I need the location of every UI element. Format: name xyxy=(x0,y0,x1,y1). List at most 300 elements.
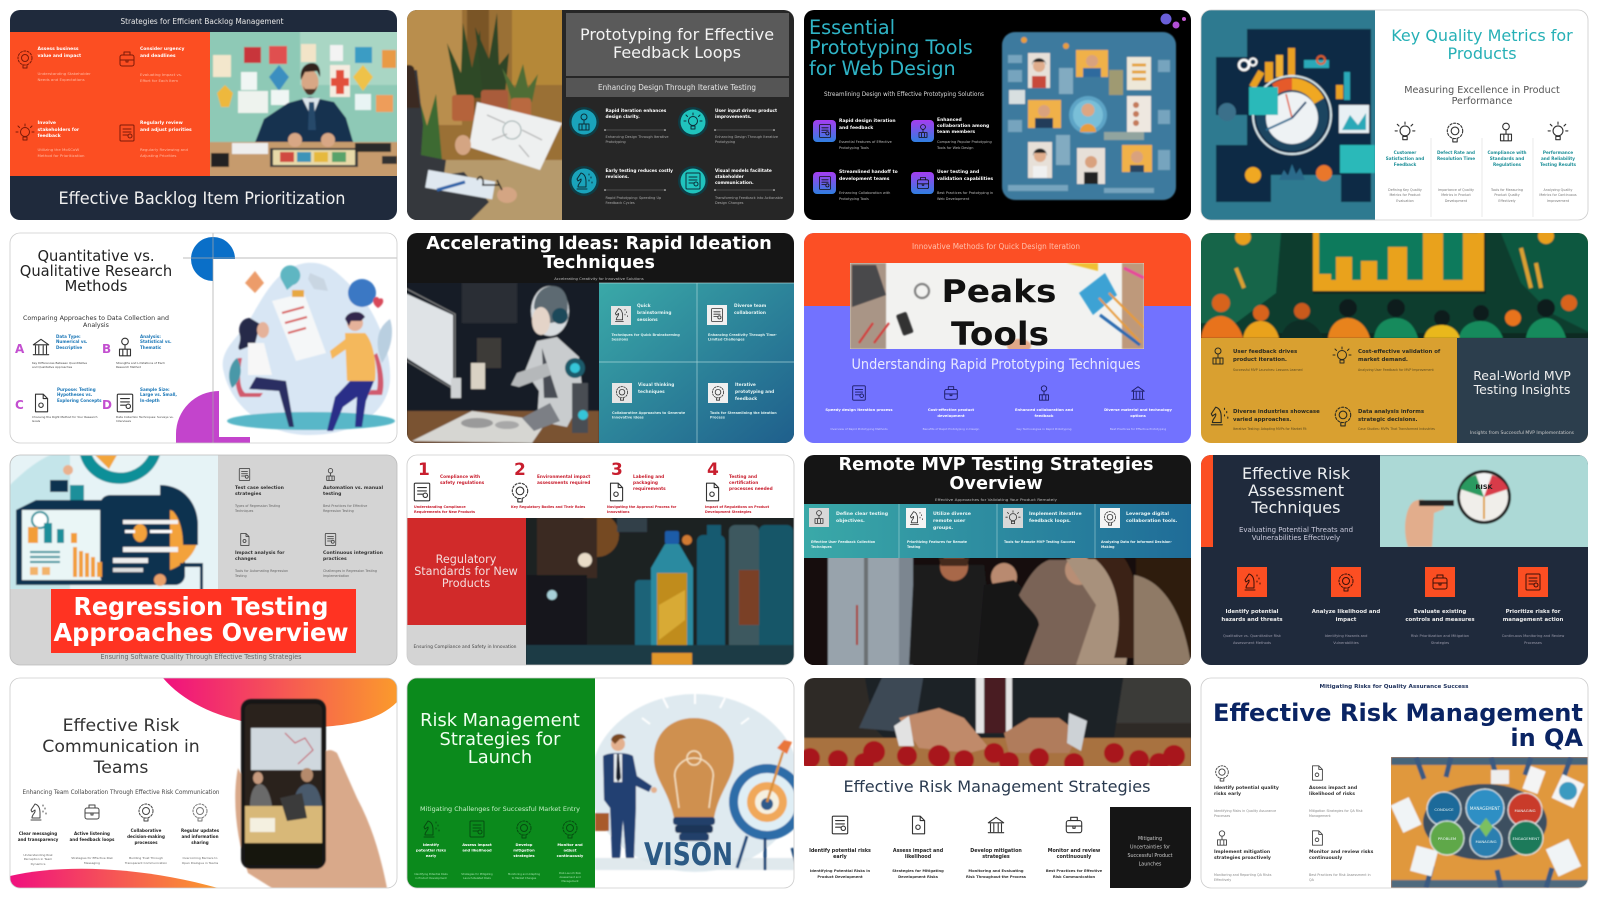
item: early testing: revisions. xyxy=(606,174,629,180)
title: Communication in xyxy=(42,737,200,757)
item 1: Requirements for New Products xyxy=(414,510,475,514)
item: defect rate: Development xyxy=(1445,199,1468,203)
item: customer satisfaction: Satisfaction and xyxy=(1386,156,1424,161)
item: monitor: QA xyxy=(1309,878,1315,882)
item: stakeholders xyxy=(16,120,85,158)
panel: mitigating uncertainties: Successful Product xyxy=(1127,853,1173,859)
item: monitor xyxy=(1046,817,1103,879)
item: diverse users: Testing xyxy=(907,545,921,549)
photo: team at window xyxy=(804,558,1191,665)
item: reliability xyxy=(1539,122,1577,203)
title: Essential xyxy=(809,16,895,39)
item: cost-effective: development xyxy=(937,414,965,418)
item: design iteration xyxy=(813,118,896,150)
item: urgency: Effort for Each Item xyxy=(140,78,178,83)
item: develop: Monitoring and Adapting xyxy=(508,872,540,876)
panel: title: Insights from Successful MVP Implementations xyxy=(1470,430,1575,436)
item B: Strengths and Limitations of Each xyxy=(116,361,165,365)
subtitle: Evaluating Potential Threats and xyxy=(1239,526,1353,534)
item: stakeholders: Involve xyxy=(38,120,56,126)
item: collaboration: collaboration among xyxy=(937,123,989,129)
item C: Exploring Concepts xyxy=(57,398,102,403)
title box: Prototyping for Effective xyxy=(580,25,774,44)
item: identify xyxy=(1214,766,1279,818)
title banner: Regression Testing xyxy=(74,592,328,621)
item: speedy xyxy=(825,386,893,431)
item: develop: Develop mitigation xyxy=(970,848,1022,854)
item D xyxy=(102,387,177,423)
item: stakeholders: Method for Prioritization xyxy=(38,153,85,158)
item D: Large vs. Small, xyxy=(140,392,177,397)
item: materials xyxy=(1104,387,1173,431)
item: stakeholders: Utilizing the MoSCoW xyxy=(38,147,79,152)
item: monitor: adjust xyxy=(564,848,577,852)
item 3: Navigating the Approval Process for xyxy=(607,505,677,509)
item: impact analysis: Testing xyxy=(234,574,247,578)
illustration: vision bulb xyxy=(595,694,794,872)
item D: In-depth xyxy=(140,398,160,403)
item: visual thinking: Visual thinking xyxy=(638,382,674,388)
item: diverse team: Diverse team xyxy=(734,303,767,309)
item: clear messaging xyxy=(18,804,59,866)
subtitle: Effective Approaches for Validating Your Product Remotely xyxy=(935,497,1058,502)
item: diverse industries: Diverse industries showcase xyxy=(1233,409,1320,415)
item: monitor: Best Practices for Effective xyxy=(1046,869,1103,873)
item: handoff xyxy=(813,169,898,201)
item: visual models: communication. xyxy=(715,180,754,186)
item: monitor: Monitor and review xyxy=(1048,848,1101,854)
item: visual thinking: techniques xyxy=(638,389,665,395)
item: collaboration: Tools for Web Design xyxy=(936,146,974,150)
item 1 xyxy=(414,460,485,514)
title banner xyxy=(51,589,356,653)
title: in QA xyxy=(1510,724,1583,752)
card: Effective Risk Management in QA xyxy=(1201,678,1591,893)
item: design iteration: Essential Features of Effective xyxy=(839,140,892,144)
item: collaboration xyxy=(911,117,992,150)
item: controls: Evaluate existing xyxy=(1414,609,1466,615)
item: hazards: Qualitative vs. Quantitative Risk xyxy=(1223,634,1282,638)
purple shape xyxy=(176,391,250,443)
item: visual thinking: Innovative Ideas xyxy=(612,416,644,420)
item: business value: value and impact xyxy=(38,53,82,59)
title: Overview xyxy=(949,474,1043,494)
item: handoff: Streamlined handoff to xyxy=(839,169,898,175)
item: assess: Assess impact xyxy=(462,843,492,847)
item: feedback loops: feedback loops. xyxy=(1029,518,1071,524)
panel: title: Real-World MVP xyxy=(1473,368,1571,383)
item: rapid iteration: Enhancing Design Through Iterative xyxy=(606,135,668,139)
item: iterative prototyping: prototyping and xyxy=(735,389,774,395)
item: assess: Launch-Related Risks xyxy=(463,876,492,880)
item: early testing: Early testing reduces costly xyxy=(606,168,673,174)
item: iterative prototyping: feedback xyxy=(735,396,757,402)
item B xyxy=(102,334,172,369)
diagram labels: CONDUCE xyxy=(1434,807,1454,812)
title: Techniques xyxy=(543,252,655,273)
card: Key Quality Metrics xyxy=(1196,5,1588,225)
item 3: 3 xyxy=(611,460,623,480)
item: cost-effective: Analyzing User Feedback for MVP Improvement xyxy=(1358,368,1434,372)
item: feedback loops: Implement iterative xyxy=(1029,511,1082,517)
item A: Data Type: xyxy=(56,334,81,339)
card: Regulatory Standards xyxy=(407,455,802,670)
item: implement: Monitoring and Reporting QA Risks xyxy=(1214,873,1272,877)
item A: Descriptive xyxy=(56,345,82,350)
item: clear objectives: objectives. xyxy=(836,518,865,524)
item: brainstorming xyxy=(611,303,680,342)
item: visual models: Transforming Feedback into Actionable xyxy=(714,196,783,200)
heading: Understanding Rapid Prototyping Techniques xyxy=(852,357,1140,373)
item: user input: Enhancing Design Through Iterative xyxy=(715,135,778,139)
item: speedy: Speedy design iteration process xyxy=(825,408,893,412)
diagram labels: MANAGEMENT xyxy=(1470,806,1501,811)
item: identify: Processes xyxy=(1214,814,1231,818)
item: automation xyxy=(323,468,383,513)
diagram labels: MANAGING xyxy=(1514,808,1536,813)
item: identify: Identifying Potential Risks in xyxy=(810,869,871,873)
illustration: team around risk diagram xyxy=(1391,757,1588,888)
subtitle: Strategies for Efficient Backlog Management xyxy=(120,17,284,26)
item 1: Compliance with xyxy=(440,474,480,480)
card: Effective Backlog Item Prioritization xyxy=(10,10,405,220)
panel: title: Products xyxy=(442,577,490,590)
panel: mitigating uncertainties xyxy=(1110,807,1191,888)
item: monitor xyxy=(1309,831,1374,882)
item: clear messaging: Dynamics xyxy=(31,862,46,866)
item C: Goals xyxy=(32,419,41,423)
panel: title xyxy=(1457,338,1588,443)
item: design iteration: Rapid design iteration xyxy=(839,118,896,124)
photo: phone in hand xyxy=(235,699,387,888)
item: identify: early xyxy=(833,854,848,860)
subtitle: Vulnerabilities Effectively xyxy=(1252,534,1340,542)
item: clear objectives: Techniques xyxy=(811,545,832,549)
illustration: clock dashboard xyxy=(1201,10,1375,220)
item 2: Environmental impact xyxy=(537,474,590,480)
item: impact analysis xyxy=(234,534,288,578)
card: Risk Management Strategies for Launch xyxy=(407,678,805,888)
item C: Choosing the Right Method for Your Research xyxy=(32,415,98,419)
card: Understanding Rapid Prototyping xyxy=(804,233,1191,443)
subtitle: Enhancing Team Collaboration Through Effective Risk Communication xyxy=(22,789,220,796)
item 2 xyxy=(511,460,590,509)
item: prioritize xyxy=(1502,567,1564,645)
sketch lettering: second word: Tools xyxy=(951,315,1049,353)
item: likelihood: Analyze likelihood and xyxy=(1312,609,1380,615)
item: compliance: Product Quality xyxy=(1494,193,1520,197)
item 4: Development Strategies xyxy=(705,510,751,514)
item: diverse users: remote user xyxy=(933,518,966,524)
item B: Analysis: xyxy=(140,334,161,339)
item: handoff: Prototyping Tools xyxy=(839,197,869,201)
item: customer satisfaction: Feedback xyxy=(1394,162,1416,167)
item: urgency: and deadlines xyxy=(140,53,176,59)
item: controls: controls and measures xyxy=(1405,617,1475,623)
item 4: processes needed xyxy=(729,486,773,492)
title: Effective Risk xyxy=(63,716,179,736)
item: rapid iteration: Prototyping xyxy=(606,140,626,144)
item: brainstorming: sessions xyxy=(637,317,658,323)
item: visual thinking xyxy=(612,382,686,420)
item: diverse team xyxy=(707,303,777,342)
illustration: blue people panel xyxy=(1002,32,1176,200)
item: collaboration: feedback xyxy=(1034,414,1054,418)
item: speedy: Overview of Rapid Prototyping Methods xyxy=(830,427,888,431)
item: cost-effective: Cost-effective validation of xyxy=(1358,349,1441,355)
item: monitor: Monitor and xyxy=(557,843,583,847)
item: early testing: Feedback Cycles xyxy=(606,201,635,205)
item: updates: and information xyxy=(181,834,219,839)
item: customer satisfaction: Evaluation xyxy=(1396,199,1414,203)
item: collaborative: Transparent Communication xyxy=(124,861,167,865)
item: business value xyxy=(18,46,91,82)
item: compliance xyxy=(1487,123,1527,203)
item: defect rate: Metrics in Product xyxy=(1441,193,1471,197)
item: user feedback xyxy=(1213,348,1303,372)
item: monitor: Monitor and review risks xyxy=(1309,849,1374,855)
illustration: data dashboard xyxy=(10,455,218,589)
title: Strategies for xyxy=(440,729,561,750)
item 1: safety regulations xyxy=(440,480,485,486)
item: implement xyxy=(1214,831,1272,882)
item: collaboration: team members xyxy=(937,129,975,135)
panel: green xyxy=(407,678,595,888)
item: assess: Strategies for Mitigating xyxy=(892,869,944,873)
item: review: and adjust priorities xyxy=(140,127,192,133)
item 1: Understanding Compliance xyxy=(414,505,466,509)
item: prioritize: Processes xyxy=(1524,641,1542,645)
heading: Effective Risk Management Strategies xyxy=(844,777,1150,796)
item 2: assessments required xyxy=(537,480,590,486)
item: assess: likelihood of risks xyxy=(1309,791,1355,797)
panel: title: Regulatory xyxy=(436,553,497,566)
item: updates: Open Dialogue in Teams xyxy=(182,861,219,865)
item: clear objectives xyxy=(809,508,888,549)
item D: D xyxy=(102,398,112,412)
item: iterative prototyping: Process xyxy=(710,416,725,420)
panel: orange strategies xyxy=(10,32,210,176)
item: identify xyxy=(414,821,448,880)
item: business value: Understanding Stakeholder xyxy=(38,71,91,76)
item: data analysis: Data analysis informs xyxy=(1358,409,1424,415)
item: updates: Overcoming Barriers to xyxy=(183,856,218,860)
card: Regression Testing xyxy=(5,450,397,665)
item: integration: Implementation xyxy=(323,574,349,578)
item: assess: Strategies for Mitigating xyxy=(461,872,493,876)
item: develop xyxy=(966,817,1027,879)
panel: tagline xyxy=(407,625,526,665)
item: iterative prototyping: Tools for Streamlining the Ideation xyxy=(710,411,777,415)
item: customer satisfaction: Customer xyxy=(1394,150,1417,155)
item: monitor: continuously xyxy=(557,854,584,858)
item: digital tools: Making xyxy=(1101,545,1115,549)
item 4: certification xyxy=(729,480,758,486)
item: updates xyxy=(181,804,220,865)
subtitle: Measuring Excellence in Product xyxy=(1404,85,1560,96)
item: hazards xyxy=(1221,567,1283,645)
item: monitor: Assessment and xyxy=(559,875,581,879)
item: clear messaging: and transparency xyxy=(18,837,59,842)
item: monitor xyxy=(557,821,584,883)
item: test case: Techniques xyxy=(234,509,254,513)
item: visual models: stakeholder xyxy=(715,174,745,180)
item: assess: likelihood xyxy=(905,854,932,860)
item: monitor: continuously xyxy=(1309,855,1342,861)
item: handoff: Enhancing Collaboration with xyxy=(839,191,890,195)
card: Effective Risk Management Strategies xyxy=(800,673,1194,888)
item: user input: User input drives product xyxy=(715,108,777,114)
title: Quantitative vs. xyxy=(37,248,155,265)
item: design iteration: and feedback xyxy=(839,125,874,131)
title: Launch xyxy=(468,747,532,768)
item 2: 2 xyxy=(514,460,526,480)
subtitle: Analysis xyxy=(83,322,109,329)
item: develop: Risk Throughout the Process xyxy=(966,875,1027,879)
item: cost-effective: Benefits of Rapid Prototyping in Design xyxy=(923,427,979,431)
item: identify: Identify potential quality xyxy=(1214,785,1279,791)
item: diverse users: Utilize diverse xyxy=(933,511,971,517)
title: Teams xyxy=(93,758,148,778)
item: likelihood: impact xyxy=(1336,617,1357,623)
item: early testing xyxy=(569,166,673,205)
item: prioritize: Prioritize risks for xyxy=(1506,609,1561,615)
subtitle: Mitigating Risks for Quality Assurance Success xyxy=(1320,684,1469,690)
item: collaboration xyxy=(1015,386,1073,431)
item 3 xyxy=(607,460,677,514)
item: collaboration: Comparing Popular Prototyping xyxy=(937,140,992,144)
item: assess: Mitigation Strategies for QA Risk xyxy=(1309,809,1363,813)
item: clear objectives: Effective User Feedback Collection xyxy=(811,540,876,544)
item: active listening: and feedback loops xyxy=(70,837,115,842)
item 3: packaging xyxy=(633,480,658,486)
title box xyxy=(566,13,789,76)
item: digital tools: Leverage digital xyxy=(1126,511,1169,517)
item: compliance: Compliance with xyxy=(1487,150,1527,155)
card: Quantitative vs Qualitative xyxy=(10,233,397,443)
item B: Thematic xyxy=(140,345,162,350)
item: develop xyxy=(508,821,540,880)
subtitle: Innovative Methods for Quick Design Iteration xyxy=(912,242,1080,251)
panel: teal strategies band xyxy=(804,504,1191,558)
item: develop: mitigation xyxy=(513,848,535,852)
panel: mitigating uncertainties: Mitigating xyxy=(1138,836,1162,842)
item B: B xyxy=(102,342,111,356)
item: updates: sharing xyxy=(191,840,209,845)
item: implement: Implement mitigation xyxy=(1214,849,1270,855)
item: user feedback: User feedback drives xyxy=(1233,349,1297,355)
item: active listening xyxy=(70,805,115,865)
item: identify: risks early xyxy=(1214,791,1241,797)
item: early testing: Rapid Prototyping: Speeding Up xyxy=(606,196,662,200)
title: Risk Management xyxy=(420,710,580,731)
item: hazards: Assessment Methods xyxy=(1233,641,1271,645)
card: Remote MVP Testing xyxy=(804,455,1196,670)
blue quarter shape xyxy=(191,237,235,281)
item: rapid iteration: Rapid iteration enhances xyxy=(606,108,667,114)
subtitle: Mitigating Challenges for Successful Market Entry xyxy=(420,805,580,813)
panel: title xyxy=(407,518,526,625)
item: cost-effective xyxy=(923,387,979,431)
item: impact analysis: Impact analysis for xyxy=(235,550,285,556)
item C: C xyxy=(15,398,24,412)
subtitle: Performance xyxy=(1452,96,1512,107)
panel: mitigating uncertainties: Launches xyxy=(1139,862,1162,868)
title: Effective Risk xyxy=(1242,464,1351,483)
item: likelihood: Identifying Hazards and xyxy=(1325,634,1367,638)
subtitle box: Enhancing Design Through Iterative Testing xyxy=(598,83,756,92)
item: reliability: Testing Results xyxy=(1540,162,1576,167)
item: compliance: Regulations xyxy=(1493,162,1522,167)
item: identify: potential risks xyxy=(416,848,447,852)
item: diverse industries: Iterative Testing: Adapting MVPs for Market Fit xyxy=(1233,427,1307,431)
item: clear objectives: Define clear testing xyxy=(836,511,888,517)
item: brainstorming: brainstorming xyxy=(637,310,671,316)
title: Key Quality Metrics for xyxy=(1391,26,1573,45)
item: handoff: development teams xyxy=(839,176,890,182)
item: likelihood: Vulnerabilities xyxy=(1333,641,1359,645)
panel: title: Standards for New xyxy=(414,565,518,578)
item: diverse users: groups. xyxy=(933,525,953,531)
item: automation: testing xyxy=(323,491,341,497)
item: collaboration: Enhanced collaboration and xyxy=(1015,408,1073,412)
item: testing: User testing and xyxy=(937,169,979,175)
item: rapid iteration: design clarity. xyxy=(606,114,640,120)
item 3: Innovations xyxy=(607,510,629,514)
item: likelihood xyxy=(1312,567,1380,645)
item: user feedback: Successful MVP Launches: Lessons Learned xyxy=(1233,368,1303,372)
item: reliability: and Reliability xyxy=(1541,156,1575,161)
item 1: 1 xyxy=(418,460,430,480)
item: design iteration: Prototyping Tools xyxy=(839,146,869,150)
item: integration xyxy=(323,534,383,578)
title: for Web Design xyxy=(809,57,956,80)
diagram labels: ENGAGEMENT xyxy=(1513,836,1540,841)
item: testing: Web Development xyxy=(937,197,970,201)
item: iterative prototyping: Iterative xyxy=(735,382,756,388)
item: urgency xyxy=(120,46,184,83)
item: user input: Prototyping xyxy=(715,140,735,144)
item: stakeholders: stakeholders for xyxy=(38,127,80,133)
diagram labels xyxy=(1434,806,1540,844)
title: Accelerating Ideas: Rapid Ideation xyxy=(426,233,772,254)
item: collaborative: decision-making xyxy=(127,834,165,839)
item: user feedback: product iteration. xyxy=(1233,357,1287,363)
title: Techniques xyxy=(1251,498,1340,517)
item: testing: Best Practices for Prototyping in xyxy=(937,191,993,195)
item: collaborative: processes xyxy=(134,840,158,845)
card: Real-World MVP Testing Insights xyxy=(1196,228,1596,443)
item: identify xyxy=(809,816,871,879)
photo: risk magnifier xyxy=(1380,455,1588,547)
item: identify: Identifying Potential Risks xyxy=(414,872,448,876)
item: brainstorming: Sessions xyxy=(612,338,628,342)
item: diverse industries: varied approaches. xyxy=(1233,417,1291,423)
item: defect rate: Importance of Quality xyxy=(1438,188,1474,192)
item: cost-effective: market demand. xyxy=(1358,357,1408,363)
item: reliability: Analyzing Quality xyxy=(1544,188,1572,192)
item 4 xyxy=(705,460,773,514)
item D: Sample Size: xyxy=(140,387,170,392)
item: visual thinking: Collaborative Approaches to Generate xyxy=(612,411,686,415)
item: updates: Regular updates xyxy=(181,828,220,833)
item: collaborative xyxy=(124,804,167,865)
item: data analysis: Case Studies: MVPs That Transformed Industries xyxy=(1358,427,1435,431)
item: develop: strategies xyxy=(513,854,535,858)
item: compliance: Standards and xyxy=(1490,156,1524,161)
accent bar xyxy=(1201,455,1213,547)
item: test case xyxy=(234,468,284,513)
